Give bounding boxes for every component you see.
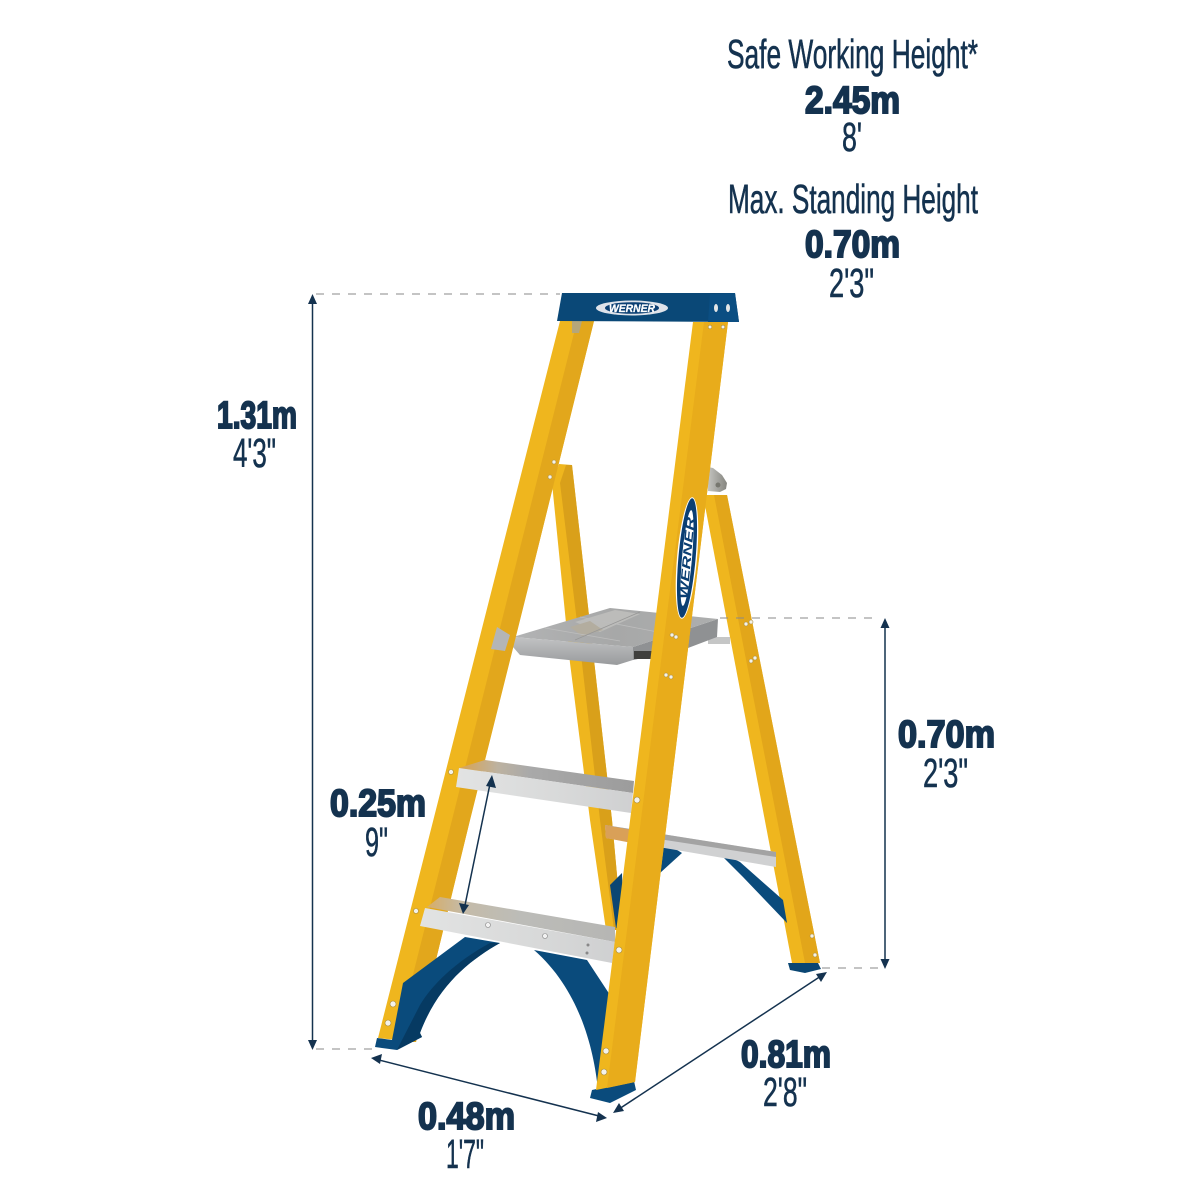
platform arm front <box>634 651 652 659</box>
label: width: 1'7" <box>446 1131 484 1177</box>
platform arm left <box>495 636 515 645</box>
front left rail <box>378 321 594 1042</box>
platform <box>513 608 718 665</box>
ladder illustration <box>375 293 821 1103</box>
bottom step <box>420 897 615 963</box>
rear blue brace left <box>655 842 682 873</box>
front blue bracket left <box>375 937 500 1050</box>
rear blue brace behind rail <box>610 873 624 930</box>
label: width: 0.48m <box>418 1096 515 1138</box>
label: depth: 2'8" <box>763 1069 807 1115</box>
platform bracket plate <box>491 627 510 651</box>
top Werner logo: WERNER <box>609 303 655 315</box>
label: width <box>418 1096 515 1177</box>
front blue bracket right <box>534 950 610 1090</box>
dimension: step spacing arrow <box>459 775 496 914</box>
text: max standing height <box>728 176 978 306</box>
label: step spacing: 9" <box>365 819 388 865</box>
text: safe working height: 8' <box>842 114 862 160</box>
dimension: width arrow <box>371 1054 607 1122</box>
top cap <box>557 293 739 322</box>
label: step spacing <box>330 783 426 865</box>
rear rung <box>605 825 776 867</box>
dimension: depth arrow <box>613 972 827 1113</box>
side Werner logo <box>672 496 702 620</box>
text: safe working height <box>727 31 978 160</box>
label: step spacing: 0.25m <box>330 783 426 825</box>
rear blue brace right <box>716 850 787 923</box>
label: platform height: 2'3" <box>923 750 968 796</box>
label: overall height: 4'3" <box>233 430 276 476</box>
label: depth: 0.81m <box>741 1034 831 1076</box>
rear right rail <box>703 495 820 963</box>
dimension: overall height arrow <box>308 294 560 1050</box>
text: max standing height: 0.70m <box>805 224 900 266</box>
dimension: platform height arrow <box>720 618 890 969</box>
top Werner logo <box>596 300 668 316</box>
label: overall height <box>217 395 297 476</box>
label: platform height <box>898 714 995 796</box>
text: safe working height: Safe Working Height* <box>727 31 978 77</box>
text: max standing height: 2'3" <box>829 260 874 306</box>
rear foot <box>788 963 821 973</box>
rear left rail <box>552 464 622 930</box>
side Werner logo: WERNER <box>676 516 698 599</box>
label: platform height: 0.70m <box>898 714 995 756</box>
front right foot <box>590 1081 636 1103</box>
middle step <box>456 760 634 813</box>
hinge plate <box>708 467 727 492</box>
label: overall height: 1.31m <box>217 395 297 437</box>
label: depth <box>741 1034 831 1115</box>
front right rail <box>596 322 728 1090</box>
platform arm right <box>708 637 730 644</box>
text: safe working height: 2.45m <box>805 80 900 122</box>
text: max standing height: Max. Standing Height <box>728 176 978 222</box>
